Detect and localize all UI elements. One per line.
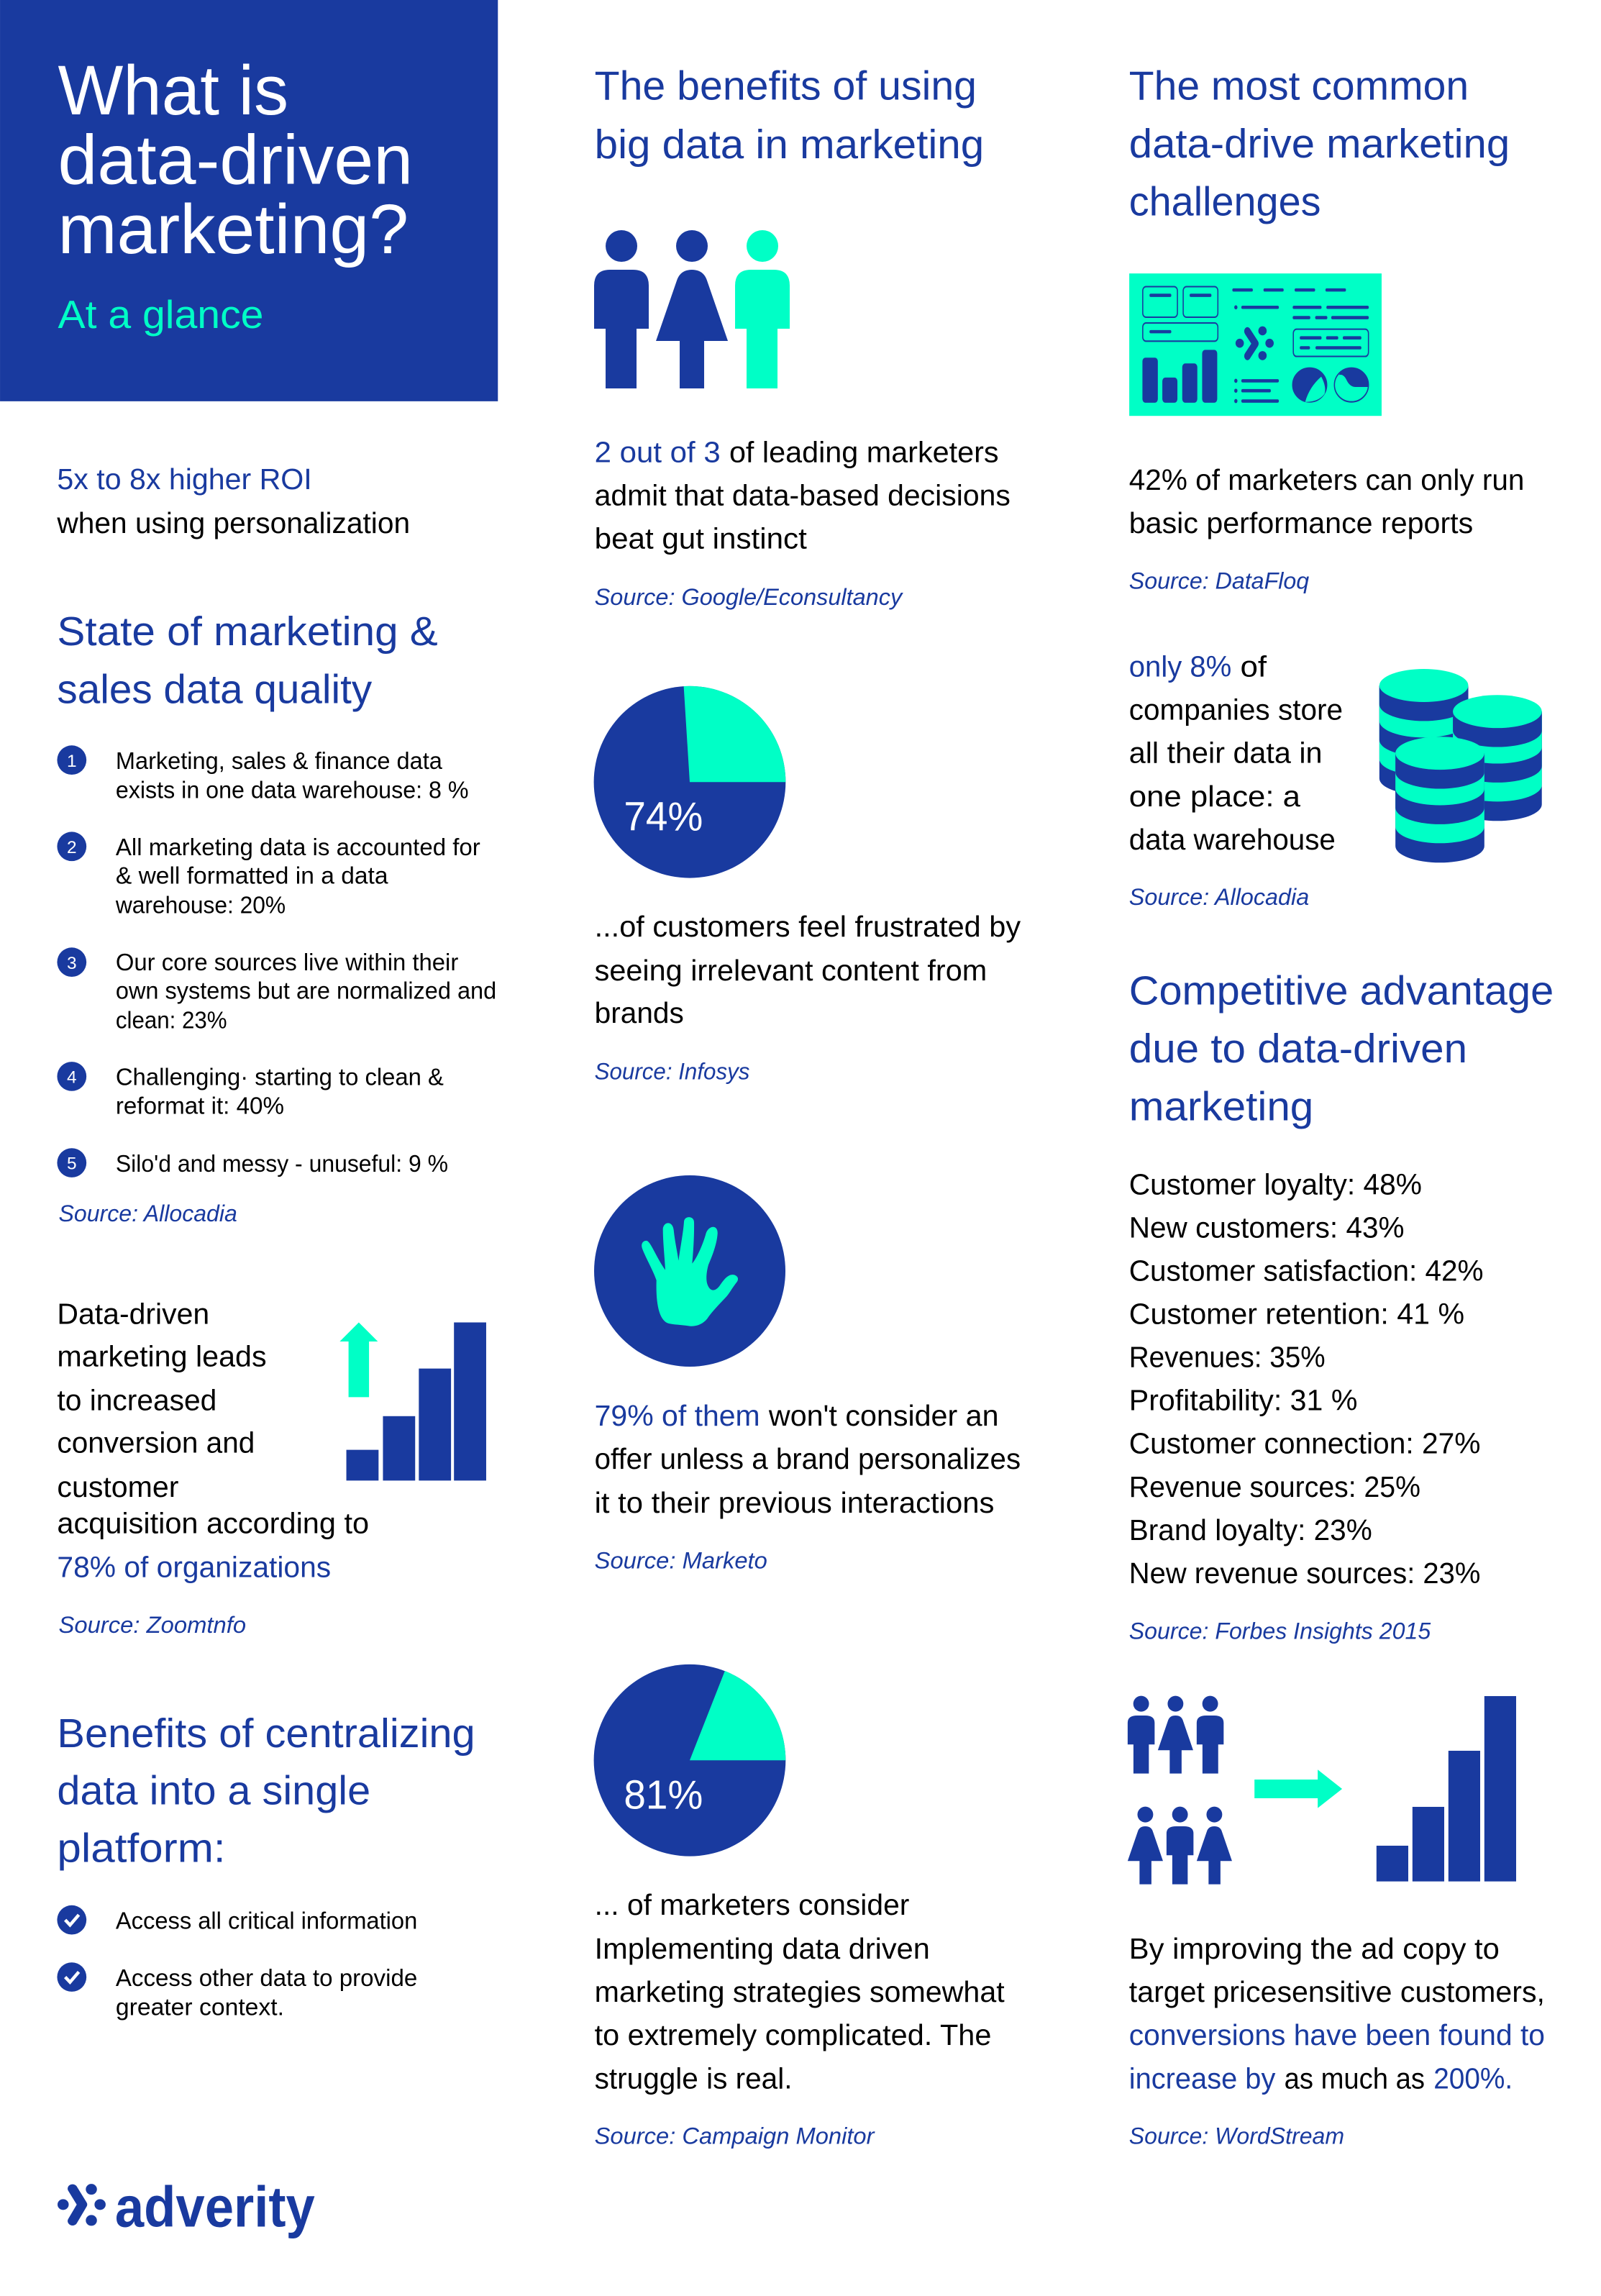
heading: competitive advantage	[1129, 968, 1554, 1130]
text block: ad copy stat: as much as	[1285, 2062, 1425, 2095]
pie chart: 74%: 74%	[624, 793, 703, 839]
text block: conversion stat: to increased	[57, 1384, 216, 1417]
heading: competitive advantage: marketing	[1129, 1084, 1313, 1130]
title: marketing?	[58, 190, 409, 268]
list: competitive advantage stats: Profitability: 31 %	[1129, 1384, 1357, 1417]
list item 1: 1	[67, 752, 77, 771]
text block: conversion stat: 78% of organizations	[57, 1551, 331, 1584]
heading: state of data quality	[57, 609, 438, 712]
text block: conversion stat: conversion and	[57, 1426, 255, 1459]
source: Allocadia: Source: Allocadia	[1129, 884, 1309, 910]
text block: ad copy stat: 200%.	[1433, 2062, 1513, 2095]
text block: conversion stat: Data-driven	[57, 1298, 209, 1331]
source: Allocadia: Source: Allocadia	[58, 1201, 237, 1226]
list item 3: clean: 23%	[116, 1007, 227, 1034]
text block: personalized offers: 79% of them	[595, 1399, 760, 1432]
list item 2: 2	[67, 838, 77, 857]
text block: ad copy stat: target pricesensitive customers,	[1129, 1975, 1545, 2008]
heading: common challenges: data-drive marketing	[1129, 121, 1510, 167]
list: competitive advantage stats: Customer retention: 41 %	[1129, 1298, 1464, 1331]
list item 2: & well formatted in a data	[116, 863, 388, 890]
list item 4: 4	[67, 1068, 77, 1088]
text block: data warehouse stat: of	[1241, 650, 1267, 683]
list item 3	[57, 947, 496, 1034]
icon: three people	[594, 230, 790, 388]
panel: title banner	[0, 0, 498, 401]
text block: gut instinct stat: of leading marketers	[729, 435, 999, 468]
text block: personalized offers	[595, 1399, 1021, 1519]
list item 3: own systems but are normalized and	[116, 978, 496, 1005]
check item 2: greater context.	[116, 1995, 284, 2021]
check item 2: Access other data to provide	[116, 1965, 417, 1992]
text block: gut instinct stat: beat gut instinct	[595, 521, 808, 555]
source: Marketo: Source: Marketo	[595, 1548, 767, 1574]
heading: benefits of centralizing: platform:	[57, 1826, 226, 1872]
heading: state of data quality: sales data quality	[57, 666, 373, 712]
graphic: people to growth	[1128, 1696, 1516, 1885]
title: data-driven	[58, 121, 413, 199]
heading: benefits of big data: big data in marketing	[595, 122, 984, 168]
text block: data warehouse stat: all their data in	[1129, 737, 1323, 770]
list item 3: Our core sources live within their	[116, 949, 458, 976]
list: competitive advantage stats: Brand loyalty: 23%	[1129, 1513, 1372, 1546]
heading: benefits of centralizing: data into a single	[57, 1767, 370, 1813]
list item 3: 3	[67, 954, 77, 973]
text block: ROI stat: 5x to 8x higher ROI	[57, 463, 312, 496]
heading: common challenges: The most common	[1129, 63, 1469, 109]
list: competitive advantage stats: New revenue sources: 23%	[1129, 1557, 1480, 1590]
list: competitive advantage stats: New customers: 43%	[1129, 1211, 1405, 1244]
title: What is	[58, 51, 288, 129]
text block: personalized offers: won't consider an	[768, 1399, 999, 1432]
text block: gut instinct stat: admit that data-based decisions	[595, 478, 1011, 511]
text block: gut instinct stat	[595, 435, 1011, 555]
text block: complicated strategies: Implementing data driven	[595, 1932, 930, 1965]
text block: conversion stat: marketing leads	[57, 1340, 267, 1373]
pie chart: 81%	[594, 1664, 785, 1857]
text block: gut instinct stat: 2 out of 3	[595, 435, 721, 468]
arrow	[1254, 1769, 1342, 1808]
text block: conversion stat: acquisition according to	[57, 1507, 369, 1540]
text block: irrelevant content: seeing irrelevant content from	[595, 954, 987, 987]
text block: personalized offers: offer unless a brand personalizes	[595, 1442, 1021, 1475]
bar chart: growth	[1377, 1696, 1516, 1882]
heading: common challenges	[1129, 63, 1510, 224]
heading: competitive advantage: due to data-driven	[1129, 1026, 1467, 1072]
list item 1: Marketing, sales & finance data	[116, 748, 442, 775]
text block: data warehouse stat: companies store	[1129, 693, 1343, 726]
text block: complicated strategies: struggle is real.	[595, 2062, 792, 2095]
heading: competitive advantage: Competitive advantage	[1129, 968, 1554, 1014]
list: competitive advantage stats: Customer connection: 27%	[1129, 1427, 1480, 1460]
text block: irrelevant content: brands	[595, 996, 684, 1029]
check item 2	[57, 1962, 417, 2021]
text block: complicated strategies: ... of marketers consider	[595, 1888, 909, 1921]
text block: conversion stat	[57, 1298, 369, 1584]
list: competitive advantage stats: Customer satisfaction: 42%	[1129, 1254, 1483, 1287]
list item 2: All marketing data is accounted for	[116, 834, 480, 861]
icon: hand in circle	[594, 1175, 785, 1367]
list item 2: warehouse: 20%	[115, 892, 286, 919]
icon: up arrow	[339, 1322, 378, 1397]
heading: benefits of centralizing: Benefits of centralizing	[57, 1710, 475, 1757]
text block: data warehouse stat: one place: a	[1129, 780, 1300, 813]
pie chart: 74%	[594, 686, 785, 878]
text block: ad copy stat: By improving the ad copy to	[1129, 1932, 1500, 1965]
list: competitive advantage stats: Revenue sources: 25%	[1129, 1470, 1420, 1503]
source: Forbes Insights: Source: Forbes Insights 2015	[1129, 1618, 1431, 1644]
checklist: centralizing benefits	[57, 1905, 417, 2021]
list item 4: Challenging· starting to clean &	[116, 1065, 444, 1091]
list item 5: 5	[67, 1154, 77, 1174]
source: Campaign Monitor: Source: Campaign Monitor	[595, 2123, 875, 2149]
text block: complicated strategies: to extremely complicated. The	[595, 2018, 991, 2051]
icon: database cylinders	[1379, 669, 1542, 862]
numbered list: data quality states	[57, 745, 496, 1177]
source: DataFloq: Source: DataFloq	[1129, 568, 1309, 593]
list: competitive advantage stats: Revenues: 35%	[1129, 1341, 1326, 1374]
logo: adverity: adverity	[115, 2175, 315, 2239]
heading: benefits of centralizing	[57, 1710, 475, 1872]
text block: basic reports stat: basic performance reports	[1129, 506, 1473, 539]
chart: rising bars with up arrow	[339, 1322, 486, 1480]
text block: complicated strategies: marketing strategies somewhat	[595, 1975, 1005, 2008]
text block: ROI stat	[56, 463, 410, 539]
list item 4	[57, 1062, 444, 1119]
list item 5: Silo'd and messy - unuseful: 9 %	[116, 1151, 448, 1177]
heading: benefits of big data	[595, 63, 984, 168]
subtitle: At a glance	[58, 292, 264, 337]
text block: ad copy stat: conversions have been found to	[1129, 2018, 1545, 2051]
text block: conversion stat: customer	[57, 1470, 178, 1503]
text block: basic reports stat	[1129, 463, 1524, 539]
source: WordStream: Source: WordStream	[1129, 2123, 1344, 2149]
heading: benefits of big data: The benefits of using	[595, 63, 977, 109]
list item 1: exists in one data warehouse: 8 %	[116, 778, 469, 804]
icon: people group	[1128, 1696, 1232, 1885]
icon: dashboard	[1129, 273, 1382, 416]
list item 2	[57, 832, 480, 919]
source: Google/Econsultancy: Source: Google/Econsultancy	[595, 584, 903, 610]
title	[58, 51, 413, 268]
pie chart: 81%: 81%	[624, 1772, 703, 1818]
heading: common challenges: challenges	[1129, 178, 1321, 224]
text block: data warehouse stat: only 8%	[1129, 650, 1231, 683]
text block: irrelevant content: ...of customers feel frustrated by	[595, 910, 1021, 943]
text block: ROI stat: when using personalization	[56, 506, 410, 539]
text block: personalized offers: it to their previous interactions	[595, 1486, 994, 1519]
check item 1: Access all critical information	[116, 1908, 417, 1934]
list item 4: reformat it: 40%	[116, 1093, 284, 1119]
list: competitive advantage stats: Customer loyalty: 48%	[1129, 1167, 1422, 1201]
text block: ad copy stat: increase by	[1129, 2062, 1276, 2095]
list item 1	[57, 745, 469, 804]
text block: ad copy stat	[1129, 1932, 1545, 2095]
text block: basic reports stat: 42% of marketers can only run	[1129, 463, 1524, 496]
list: competitive advantage stats	[1129, 1167, 1483, 1590]
text block: data warehouse stat: data warehouse	[1129, 823, 1336, 856]
text block: complicated strategies	[595, 1888, 1005, 2095]
text block: data warehouse stat	[1129, 650, 1343, 856]
source: Infosys: Source: Infosys	[595, 1059, 749, 1085]
source: Zoomtnfo: Source: Zoomtnfo	[58, 1612, 246, 1638]
text block: irrelevant content	[595, 910, 1021, 1029]
icon: adverity mark	[58, 2184, 106, 2226]
heading: state of data quality: State of marketing &	[57, 609, 438, 655]
